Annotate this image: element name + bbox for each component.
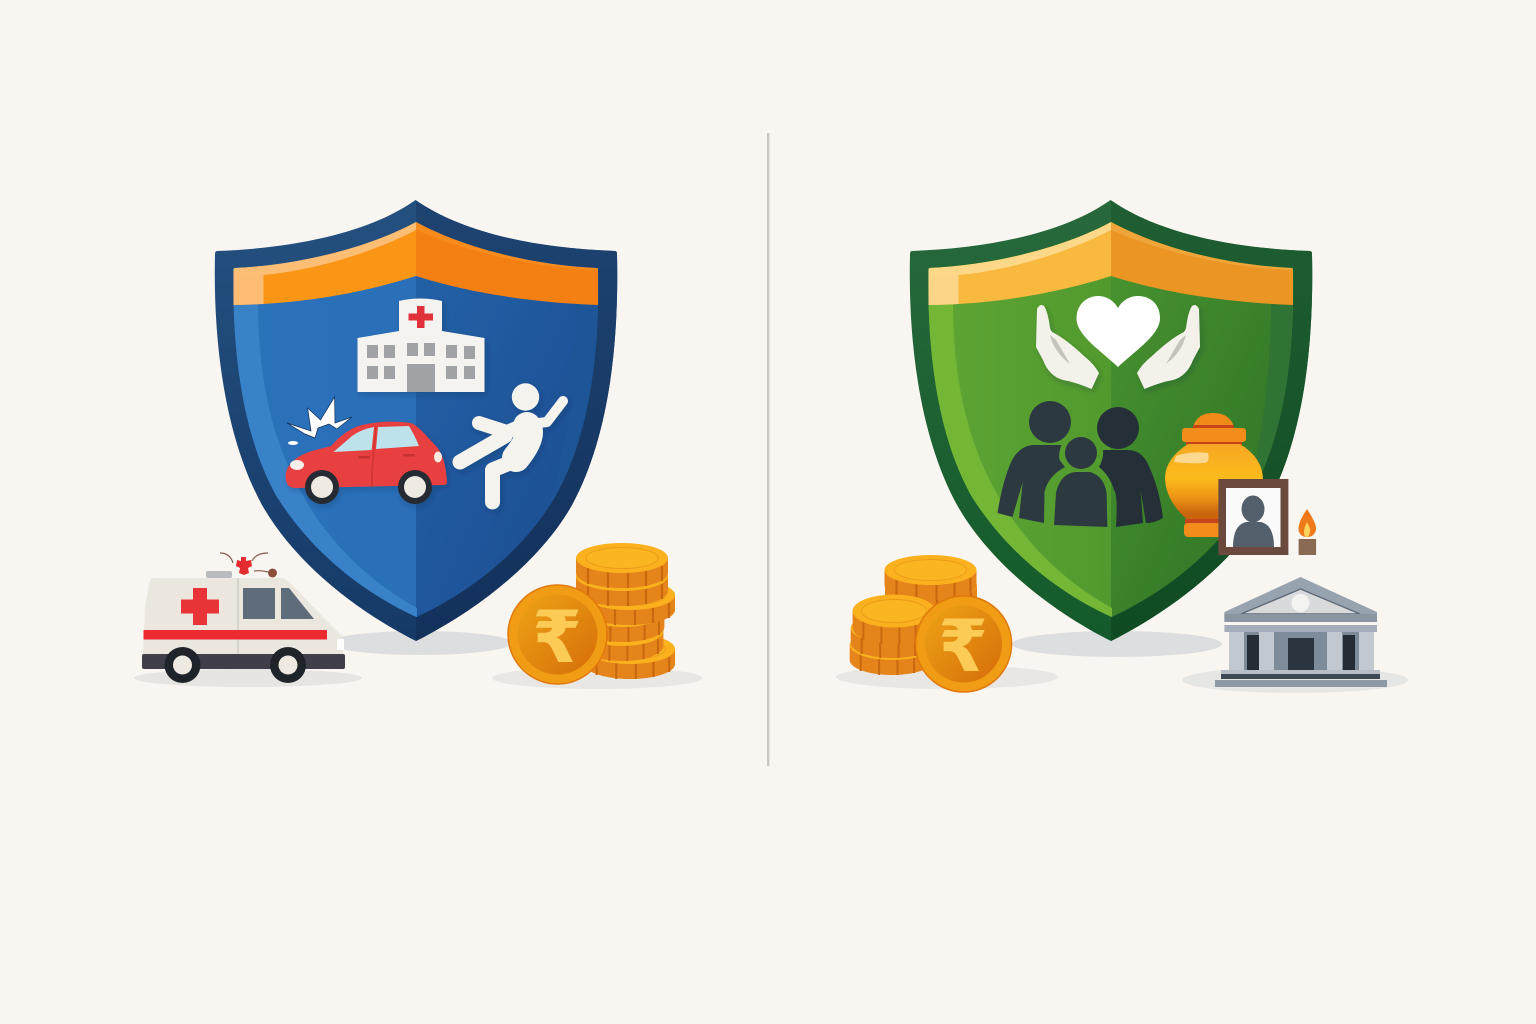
ground shadow: bank [1182,667,1408,693]
blue shield [215,190,626,650]
icon: ambulance [142,553,345,683]
icon: rupee coin [916,596,1012,692]
icon: falling person [460,383,563,502]
icon: rupee coin [508,585,607,684]
ambulance windows [243,588,275,619]
infographic canvas [134,133,1408,766]
facade [1232,632,1370,670]
portrait silhouette [1233,496,1274,547]
ambulance cross [181,588,219,625]
ground shadow: green shield [1012,631,1222,657]
right adult [1097,407,1163,527]
ground shadow: blue shield [328,631,512,655]
panel: accident and health cover [134,190,702,689]
hospital cross [408,306,433,328]
orange band [234,222,598,305]
icon: right caring hand [1137,305,1200,389]
steps [1221,670,1380,675]
panel: life and family cover [836,190,1408,693]
icon: urn [1165,413,1263,537]
ground shadow: ambulance [134,669,362,687]
ambulance wheels [164,647,200,683]
icon: red car [286,422,447,504]
car wheels [305,470,339,504]
ground shadow: coins [492,667,702,689]
ground shadow: coins [836,665,1058,689]
icon: left caring hand [1036,305,1099,389]
left adult [998,401,1071,523]
car windows [334,426,419,452]
icon: coin stacks [850,555,977,675]
siren [206,553,277,578]
pediment [1224,577,1377,622]
rupee symbol: ₹ [938,604,988,688]
yellow band [928,222,1293,305]
icon: memorial photo frame [1218,479,1288,555]
columns [1229,632,1374,670]
icon: family [998,401,1163,527]
rupee symbol: ₹ [532,595,582,679]
center divider [767,133,769,766]
icon: candle [1298,509,1316,555]
icon: bank building [1215,577,1387,687]
icon: crash burst [287,397,352,445]
icon: coin stack [576,543,675,679]
child [1054,437,1107,527]
green shield [910,190,1321,650]
icon: heart [1076,296,1160,367]
icon: hospital [358,298,484,392]
